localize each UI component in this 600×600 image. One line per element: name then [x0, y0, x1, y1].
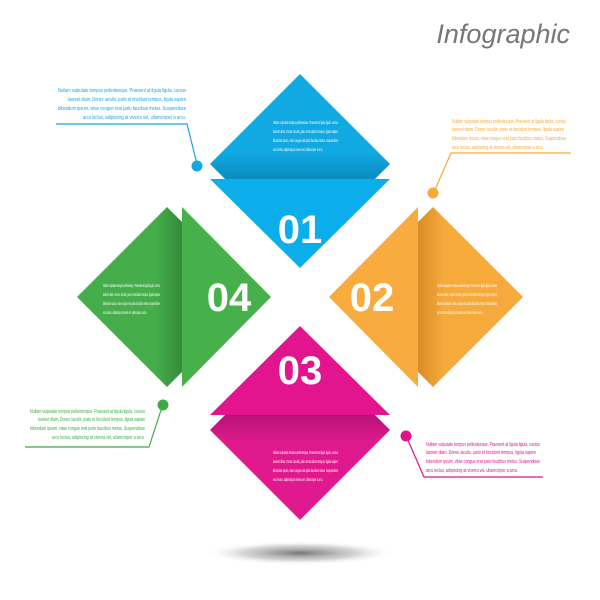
callout: blue: Nullam vulputate tempus pellentesque. Praesent at ligula ligula, cursus: [58, 88, 186, 94]
text: bibendum ipsum, vitae congue erat justo faucibus metus. Suspendisse: [273, 468, 338, 473]
text: Nullam vulputate tempus pellentesque. Praesent at ligula ligula, cursus: [437, 283, 497, 288]
text: laoreet diam. Donec iaculis, justo et tincidunt tempus, ligula sapien: [437, 292, 497, 297]
callout: green: Nullam vulputate tempus pellentesque. Praesent at ligula ligula, cursus: [30, 409, 145, 415]
text: Nullam vulputate tempus pellentesque. Praesent at ligula ligula, cursus: [273, 120, 338, 125]
callout: pink: Nullam vulputate tempus pellentesque. Praesent at ligula ligula, cursus: [426, 442, 540, 448]
text: Nullam vulputate tempus pellentesque. Praesent at ligula ligula, cursus: [273, 450, 338, 455]
diamond text pink: arcu lectus, adipiscing at viverra vel, ullamcorper a arcu.: [273, 477, 323, 482]
diamond text blue: arcu lectus, adipiscing at viverra vel, ullamcorper a arcu.: [273, 147, 323, 152]
diamond text pink: laoreet diam. Donec iaculis, justo et tincidunt tempus, ligula sapien: [273, 459, 338, 464]
diamond text orange: [437, 283, 497, 315]
panel: 02 orange: [329, 207, 523, 387]
callout: green: [25, 400, 168, 447]
diamond text green: [103, 283, 160, 315]
callout: green: arcu lectus, adipiscing at viverra vel, ullamcorper a arcu.: [52, 435, 145, 441]
diamond text orange: arcu lectus, adipiscing at viverra vel, ullamcorper a arcu.: [437, 310, 483, 315]
callout: blue: arcu lectus, adipiscing at viverra vel, ullamcorper a arcu.: [83, 115, 186, 121]
callout: green: laoreet diam. Donec iaculis, justo et tincidunt tempus, ligula sapien: [38, 417, 145, 423]
callout: green: bibendum ipsum, vitae congue erat justo faucibus metus. Suspendisse: [30, 426, 145, 432]
callout: pink: arcu lectus, adipiscing at viverra vel, ullamcorper a arcu.: [426, 468, 518, 474]
title: Infographic: [436, 19, 570, 49]
number 01: 01: [278, 208, 322, 252]
text: bibendum ipsum, vitae congue erat justo faucibus metus. Suspendisse: [273, 138, 338, 143]
panel: 01 blue: [210, 74, 390, 268]
panel: 04 green: [77, 207, 271, 387]
callout: pink: [400, 430, 543, 477]
shadow: [205, 541, 395, 565]
diamond text blue: laoreet diam. Donec iaculis, justo et tincidunt tempus, ligula sapien: [273, 129, 338, 134]
callout: blue: laoreet diam. Donec iaculis, justo et tincidunt tempus, ligula sapien: [68, 97, 186, 103]
text: Nullam vulputate tempus pellentesque. Praesent at ligula ligula, cursus: [103, 283, 160, 288]
diamond text blue: [273, 120, 338, 152]
number 04: 04: [207, 276, 252, 320]
callout: orange: arcu lectus, adipiscing at viverra vel, ullamcorper a arcu.: [452, 145, 544, 151]
number 02: 02: [350, 276, 394, 320]
text: bibendum ipsum, vitae congue erat justo faucibus metus. Suspendisse: [437, 301, 497, 306]
diamond text green: arcu lectus, adipiscing at viverra vel, ullamcorper a arcu.: [103, 310, 147, 315]
text: laoreet diam. Donec iaculis, justo et tincidunt tempus, ligula sapien: [103, 292, 160, 297]
text: bibendum ipsum, vitae congue erat justo faucibus metus. Suspendisse: [103, 301, 160, 306]
callout: pink: bibendum ipsum, vitae congue erat justo faucibus metus. Suspendisse: [426, 459, 540, 465]
number 03: 03: [278, 349, 322, 393]
diamond text pink: [273, 450, 338, 482]
callout: orange: [428, 119, 571, 198]
callout: pink: laoreet diam. Donec iaculis, justo et tincidunt tempus, ligula sapien: [426, 450, 536, 456]
callout: blue: [56, 88, 202, 172]
callout: blue: bibendum ipsum, vitae congue erat justo faucibus metus. Suspendisse: [58, 106, 186, 112]
panel: 03 pink: [210, 326, 390, 520]
